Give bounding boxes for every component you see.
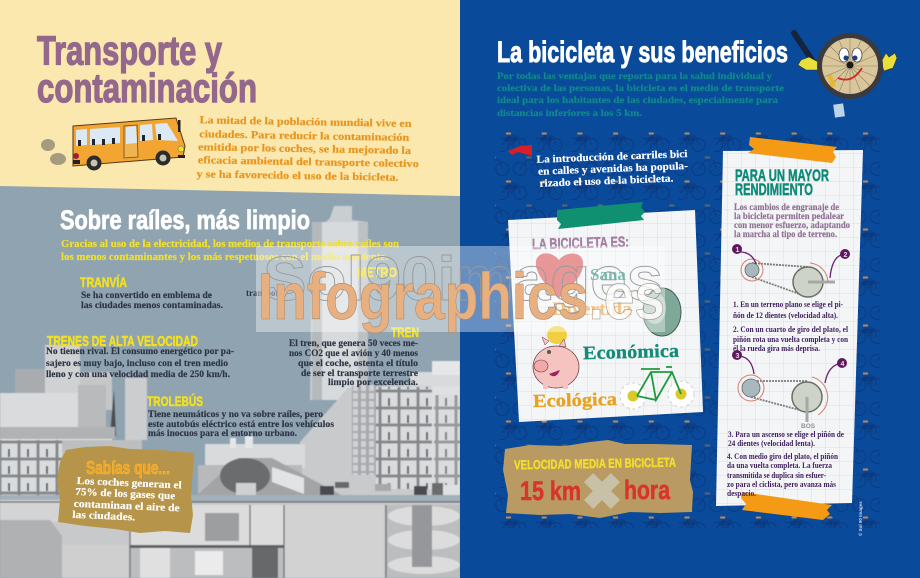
block: metro: transporte (246, 288, 286, 298)
block: tren: limpio por excelencia. (328, 377, 418, 387)
icon: red flag (508, 145, 532, 156)
text: steps 1 and 2: ñón de 12 dientes (velocidad alta). (733, 310, 838, 320)
block: tren: de ser el transporte terrestre (301, 368, 418, 378)
callout: sabías que (57, 446, 194, 533)
text: engranaje: con menor esfuerzo, adaptando (734, 220, 850, 230)
block: trolebús: este autobús eléctrico está entre los vehículos (148, 419, 335, 429)
watermark: Infographics.es (258, 259, 665, 333)
watermark: Sol90images (263, 245, 663, 314)
text: steps 3 and 4: da una vuelta completa. La fuerza (727, 460, 833, 470)
panel: la bicicleta es note (508, 202, 703, 422)
callout: velocidad media: 15 km (520, 476, 581, 506)
callout: sabías que: 75% de los gases que (75, 487, 176, 502)
block: trenes de alta velocidad (46, 333, 234, 379)
block: metro: METRO (357, 264, 397, 280)
block: tranvía (80, 274, 223, 310)
text: steps 1 and 2: 2. Con un cuarto de giro del plato, el (733, 324, 849, 334)
title: Transporte y (37, 28, 222, 74)
diagram: flat terrain gears (732, 244, 850, 297)
block: tren: El tren, que genera 50 veces me- (289, 338, 418, 348)
intro text (196, 115, 420, 184)
intro text: ciudades. Para reducir la contaminación (199, 129, 409, 144)
diagram: uphill gears: BOS (801, 423, 816, 430)
intro text: ventajas: Por todas las ventajas que reporta para la salud individual y (497, 71, 772, 82)
icon: heart (536, 253, 583, 298)
text: steps 1 and 2: 1. En un terreno plano se elige el pi- (733, 299, 843, 309)
panel: cream header background (0, 0, 460, 200)
underground (0, 502, 460, 578)
block: tren: nos CO2 que el avión y 40 menos (289, 348, 419, 358)
block: trolebús: más inocuos para el entorno urbano. (148, 428, 297, 438)
text: steps 3 and 4: 3. Para un ascenso se elige el piñón de (728, 429, 844, 439)
diagram: uphill gears: 3 (736, 353, 740, 360)
block: trenes de alta velocidad: No tienen rival. El consumo energético por pa- (46, 346, 234, 356)
text: engranaje: la marcha al tipo de terreno. (734, 229, 837, 239)
panel: para un mayor rendimiento note (716, 137, 863, 520)
callout: sabías que: las ciudades. (72, 510, 136, 523)
label: económica: Económica (583, 341, 680, 364)
intro text: ventajas: distancias inferiores a los 5 km. (497, 108, 643, 119)
avenue (195, 458, 345, 497)
title (37, 28, 257, 111)
icon: plaster cross (584, 473, 620, 509)
panel: grey-blue transport section (0, 186, 460, 578)
tall tower (310, 206, 368, 400)
heading: para un mayor rendimiento: PARA UN MAYOR (735, 166, 829, 185)
tape: orange bottom (741, 492, 832, 520)
heading: la bicicleta: La bicicleta y sus beneficios (497, 36, 788, 69)
tape: green (557, 202, 645, 229)
text: steps 3 and 4: 4. Con medio giro del plato, el piñón (727, 451, 838, 461)
text: steps 3 and 4: transmitida se duplica sin esfuer- (727, 470, 826, 480)
diagram: uphill gears: 4 (840, 361, 844, 368)
block: metro (246, 264, 397, 298)
intro text: ventajas (497, 71, 785, 119)
block: trolebús: Tiene neumáticos y no va sobre raíles, pero (148, 409, 324, 419)
left block with windows (0, 427, 112, 495)
right office blocks (300, 380, 460, 497)
subheading: gracias a la electricidad (61, 239, 399, 263)
text: steps 3 and 4: despacio. (727, 488, 756, 498)
intro text: y se ha favorecido el uso de la bicicleta. (196, 169, 399, 184)
block: trenes de alta velocidad: sajero es muy bajo, incluso con el tren medio (46, 358, 229, 368)
icon: green bicycle with daisies (620, 367, 694, 409)
text: carriles bici (536, 149, 689, 190)
callout: sabías que: Los coches generan el (77, 476, 182, 491)
intro text: emitida por los coches, se ha mejorado la (198, 142, 412, 157)
text: engranaje: Los cambios de engranaje de (734, 202, 839, 212)
intro text: eficacia ambiental del transporte colectivo (198, 155, 419, 170)
tape: orange top (748, 137, 837, 163)
block: tranvía: Se ha convertido en emblema de (81, 290, 212, 300)
icon: wheel mascot (794, 33, 897, 118)
heading: para un mayor rendimiento (735, 166, 829, 199)
title: contaminación (37, 65, 257, 111)
intro text: ventajas: colectiva de las personas, la bicicleta es el medio de transporte (497, 83, 785, 94)
block: trolebús: TROLEBÚS (147, 392, 203, 409)
block: trolebús (147, 392, 335, 438)
subheading: gracias a la electricidad: Gracias al uso de la electricidad, los medios de transporte sobre raíles son (61, 239, 399, 250)
text: steps 1 and 2: piñón rota una vuelta completa y con (733, 334, 848, 344)
illustration: city cross-section (0, 206, 460, 578)
text: steps 1 and 2 (733, 299, 849, 353)
label: ecológica: Ecológica (533, 390, 617, 412)
block: tren (289, 324, 419, 387)
intro text: ventajas: ideal para los habitantes de las ciudades, especialmente para (497, 95, 778, 106)
block: tranvía: TRANVÍA (80, 274, 127, 290)
callout: velocidad media: hora (624, 475, 671, 505)
callout: sabías que: contaminan el aire de (74, 499, 180, 514)
pale street level band (0, 495, 460, 502)
text: steps 3 and 4 (727, 429, 844, 498)
diagram: flat terrain gears: 1 (736, 247, 740, 254)
callout: velocidad media: VELOCIDAD MEDIA EN BICICLETA (514, 455, 677, 472)
block: trenes de alta velocidad: lleno y con una velocidad media de 250 km/h. (46, 369, 230, 379)
heading: sobre raíles: Sobre raíles, más limpio (60, 205, 310, 235)
icon: yellow bus with exhaust (41, 118, 185, 170)
block: tranvía: las ciudades menos contaminadas. (81, 300, 223, 310)
diagram: uphill gears (732, 350, 847, 430)
block: tren: que el coche, ostenta el título (298, 358, 419, 368)
left skyline (15, 369, 50, 399)
label: divertida: Divertida (552, 299, 633, 320)
text: carriles bici: en calles y avenidas ha popula- (538, 161, 689, 178)
callout: sabías que: Sabías que... (86, 458, 170, 478)
diagram: flat terrain gears: 2 (844, 252, 848, 259)
text: engranaje: la bicicleta permiten pedalear (734, 211, 844, 221)
text: carriles bici: La introducción de carriles bici (536, 149, 688, 166)
panel: blue bicycle page (460, 0, 920, 578)
block: tren: TREN (391, 324, 419, 340)
text: steps 1 and 2: él la rueda gira más deprisa. (733, 343, 820, 353)
distant street (205, 444, 305, 468)
text: steps 3 and 4: 24 dientes (velocidad lenta). (728, 438, 815, 448)
heading: para un mayor rendimiento: RENDIMIENTO (735, 180, 813, 199)
label: sana: Sana (590, 265, 626, 284)
intro text: La mitad de la población mundial vive en (199, 115, 412, 130)
subheading: gracias a la electricidad: los menos contaminantes y los más respetuosos con el medio ambiente. (61, 252, 389, 263)
text: steps 3 and 4: zo para el ciclista, pero avanza más (727, 479, 837, 489)
callout: velocidad media (503, 440, 693, 518)
icon: green ring (643, 288, 681, 336)
icon: piggy bank (533, 326, 579, 389)
text: engranaje (734, 202, 850, 239)
background: bicycle pattern (495, 128, 880, 528)
heading: la bicicleta es: LA BICICLETA ES: (532, 234, 629, 253)
text: carriles bici: rizado el uso de la bicicleta. (539, 174, 674, 190)
block: trenes de alta velocidad: TRENES DE ALTA VELOCIDAD (47, 333, 198, 350)
credit: © Sol 90 Images (857, 501, 863, 536)
